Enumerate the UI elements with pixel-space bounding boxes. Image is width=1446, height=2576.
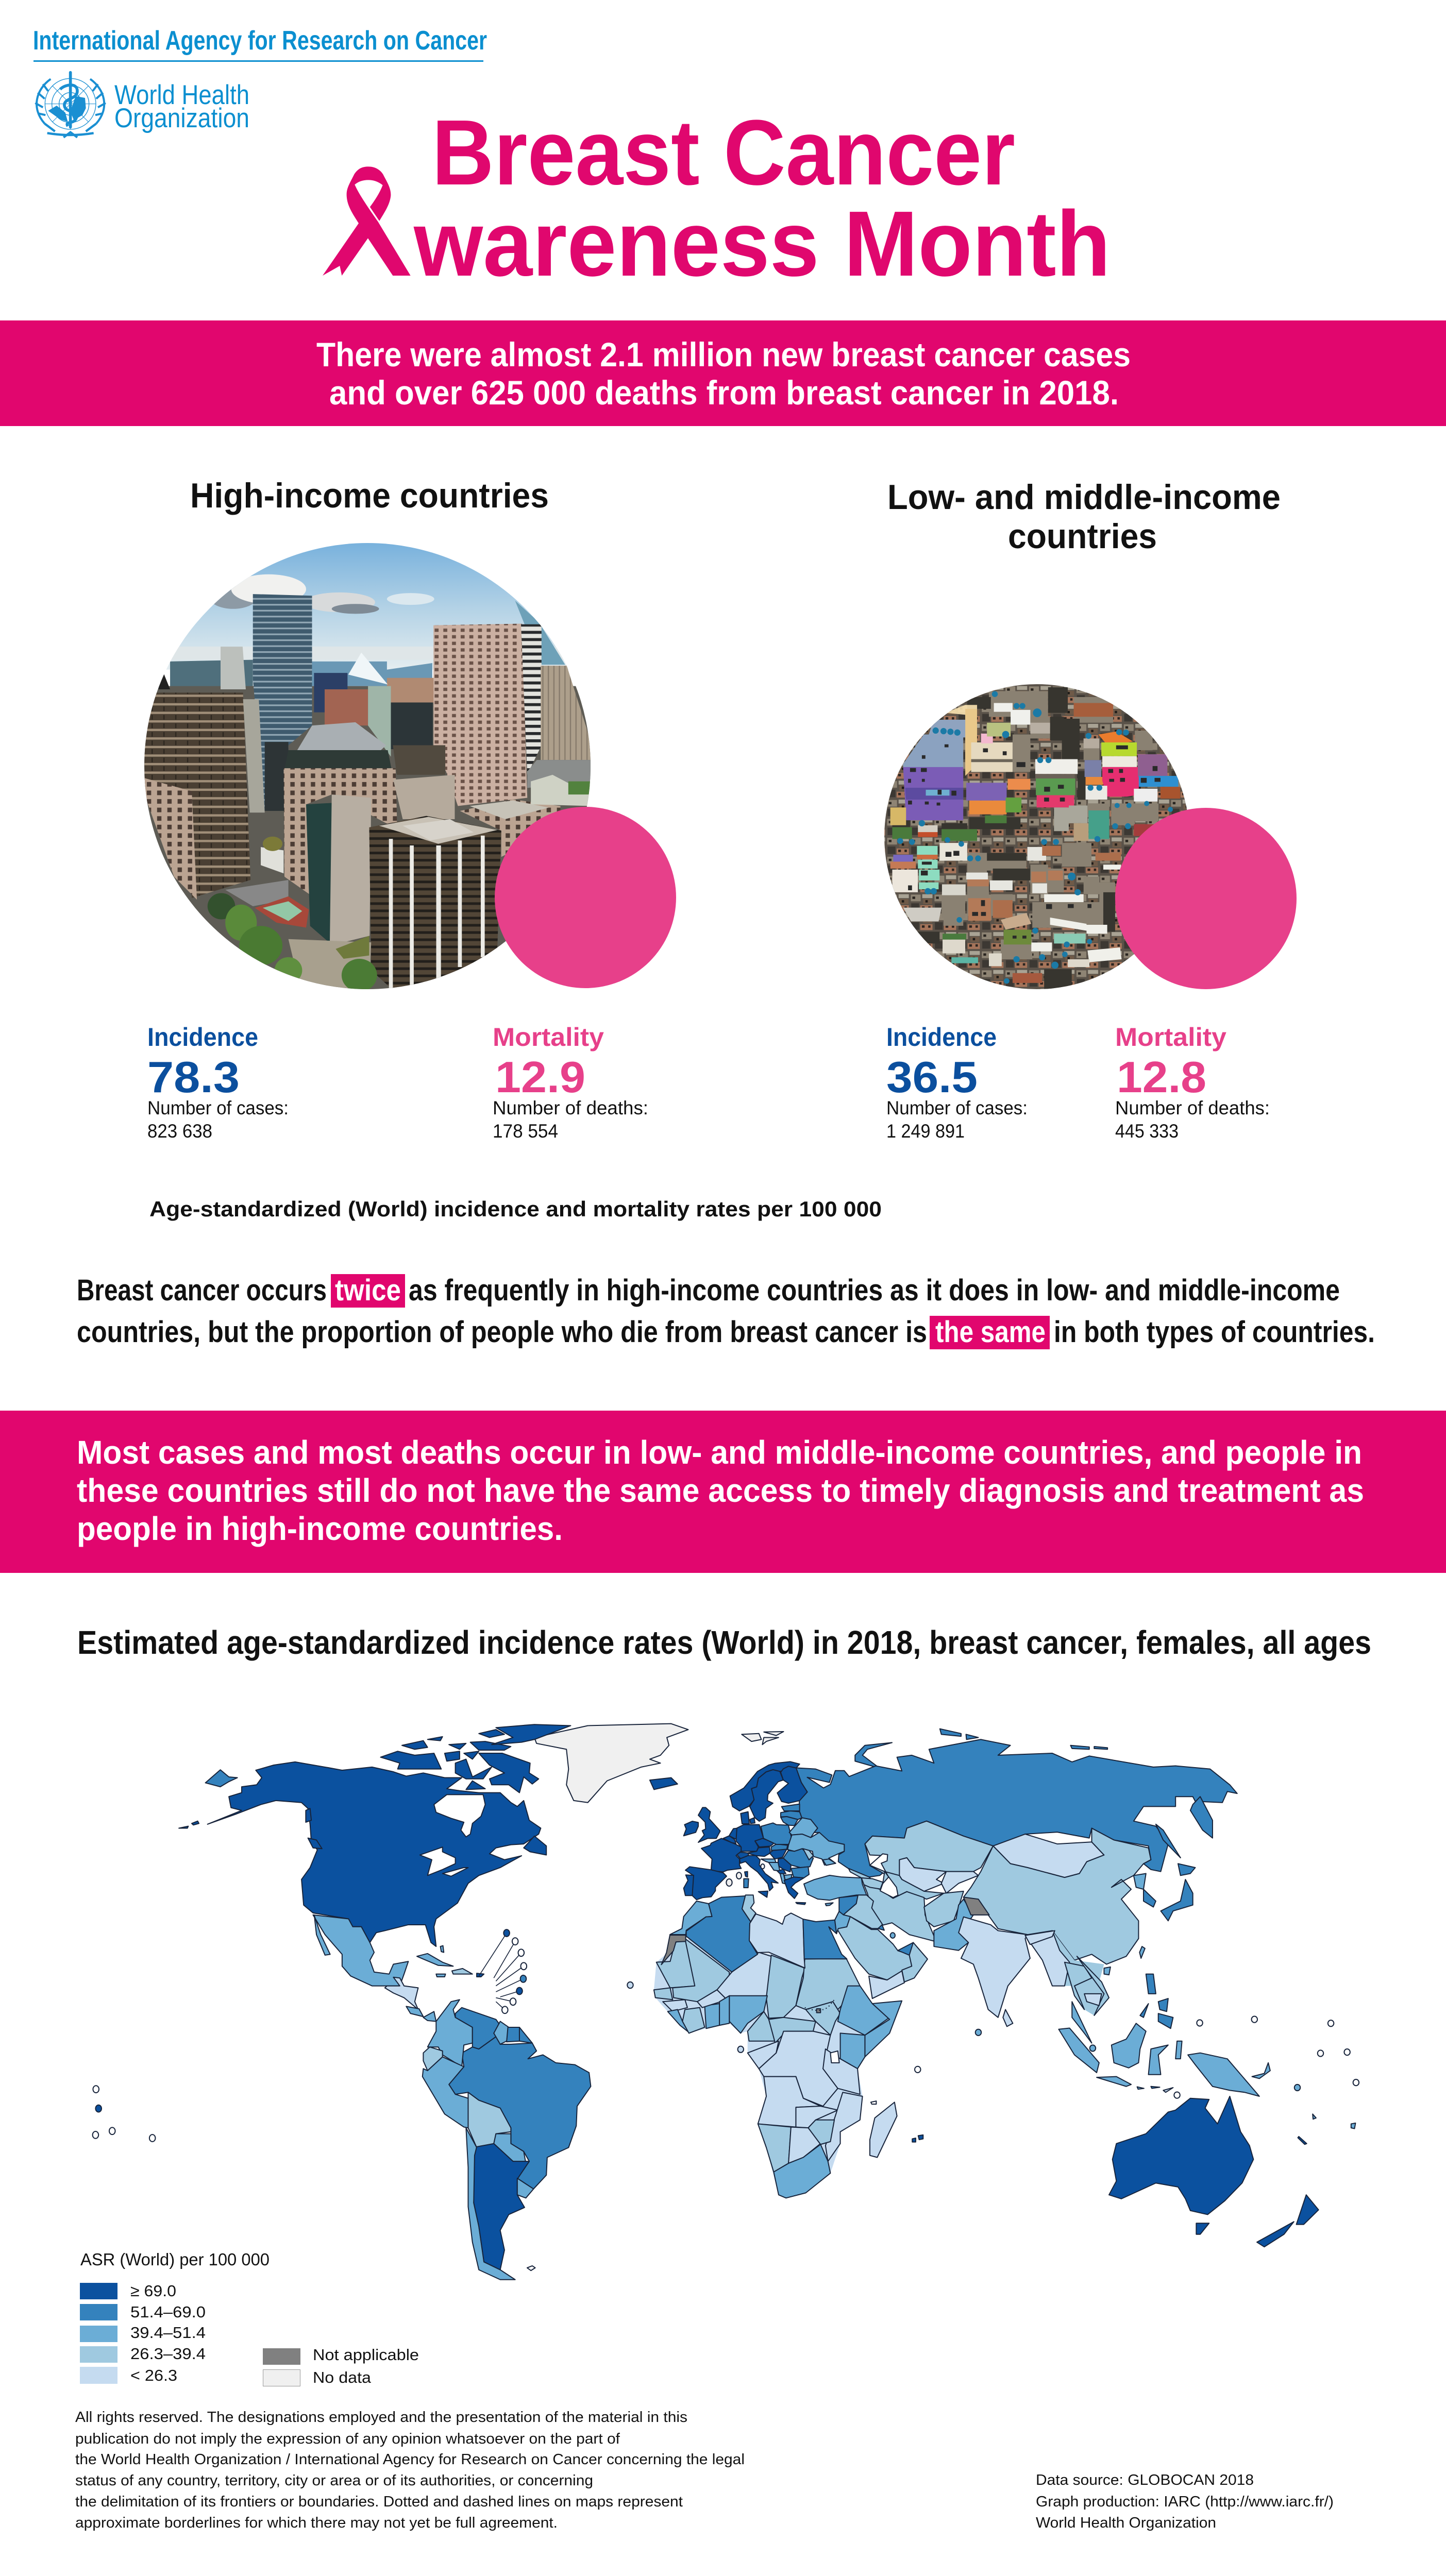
disclaimer text: publication do not imply the expression of any opinion whatsoever on the part of (75, 2431, 620, 2447)
banner: access to care: Most cases and most deaths occur in low- and middle-income countries, and people in (77, 1434, 1362, 1471)
comparison paragraph: the same (935, 1315, 1046, 1349)
comparison paragraph (77, 1274, 1375, 1349)
data source credits: Graph production: IARC (http://www.iarc.fr/) (1036, 2494, 1334, 2510)
rates caption: Age-standardized (World) incidence and mortality rates per 100 000 (149, 1197, 882, 1221)
stats: high-income mortality: Number of deaths: (493, 1097, 648, 1118)
disclaimer text: approximate borderlines for which there may not yet be full agreement. (75, 2515, 558, 2531)
legend: not applicable and no data: No data (313, 2368, 372, 2386)
legend: ASR colour scale: 26.3–39.4 (130, 2345, 206, 2363)
WHO wordmark (114, 80, 249, 133)
IARC header text (33, 26, 487, 62)
stats: low- and middle-income mortality (1115, 1023, 1270, 1142)
legend: not applicable and no data: Not applicable (313, 2346, 419, 2364)
comparison paragraph: Breast cancer occurs (77, 1274, 327, 1307)
map: Europe, Middle East and North Africa (661, 1761, 895, 1972)
map: Asia, sub-Saharan Africa and Oceania (627, 1729, 1359, 2247)
data source credits (1036, 2472, 1334, 2531)
stats: high-income incidence: Incidence (147, 1023, 258, 1052)
banner: global burden: There were almost 2.1 million new breast cancer cases (316, 335, 1131, 374)
WHO wordmark: World Health (114, 80, 249, 110)
photo: favela in circle (884, 683, 1192, 993)
stats: high-income incidence: 823 638 (147, 1121, 212, 1142)
legend: not applicable and no data (263, 2346, 419, 2386)
heading: low- and middle-income countries (887, 478, 1281, 556)
disclaimer text: All rights reserved. The designations employed and the presentation of the material in this (75, 2409, 687, 2426)
banner: access to care: these countries still do not have the same access to timely diagnosis and treatment as (77, 1472, 1364, 1509)
stats: high-income mortality: 12.9 (495, 1053, 585, 1102)
WHO wordmark: Organization (114, 103, 249, 133)
stats: low- and middle-income mortality: 12.8 (1117, 1053, 1206, 1102)
stats: high-income incidence (147, 1023, 289, 1142)
legend: ASR colour scale: ≥ 69.0 (130, 2282, 176, 2300)
stats: low- and middle-income mortality: 445 333 (1115, 1121, 1179, 1142)
mortality circle: low- and middle-income (1115, 808, 1297, 989)
banner: access to care: people in high-income countries. (77, 1510, 563, 1547)
banner: global burden (0, 320, 1446, 426)
stats: high-income mortality: Mortality (493, 1023, 604, 1052)
legend: ASR colour scale (80, 2250, 270, 2384)
legend: ASR colour scale: < 26.3 (130, 2366, 177, 2384)
legend: ASR colour scale: 51.4–69.0 (130, 2303, 206, 2321)
data source credits: World Health Organization (1036, 2515, 1216, 2531)
stats: low- and middle-income incidence: Number of cases: (886, 1097, 1028, 1118)
stats: high-income mortality: 178 554 (493, 1121, 558, 1142)
choropleth world map (93, 1724, 1359, 2280)
stats: high-income mortality (493, 1023, 648, 1142)
comparison paragraph: twice (335, 1274, 401, 1307)
stats: low- and middle-income incidence (886, 1023, 1028, 1142)
comparison paragraph: countries, but the proportion of people who die from breast cancer is (77, 1315, 927, 1349)
banner: access to care (0, 1411, 1446, 1573)
stats: low- and middle-income incidence: 36.5 (886, 1053, 978, 1102)
banner: global burden: and over 625 000 deaths from breast cancer in 2018. (329, 374, 1119, 412)
photo: high-income city skyline in circle (139, 538, 600, 992)
disclaimer text: the delimitation of its frontiers or boundaries. Dotted and dashed lines on maps represent (75, 2494, 683, 2510)
comparison paragraph: in both types of countries. (1054, 1315, 1375, 1349)
stats: high-income incidence: Number of cases: (147, 1097, 289, 1118)
heading: low- and middle-income countries: Low- and middle-income (887, 478, 1281, 517)
mortality circle: high-income (495, 807, 676, 988)
title: Breast Cancer (432, 101, 1015, 205)
stats: low- and middle-income incidence: 1 249 891 (886, 1121, 965, 1142)
heading: high-income countries: High-income countries (190, 476, 549, 515)
data source credits: Data source: GLOBOCAN 2018 (1036, 2472, 1254, 2488)
stats: low- and middle-income mortality: Mortality (1115, 1023, 1226, 1052)
disclaimer text (75, 2409, 745, 2531)
map: Americas and Greenland (93, 1724, 688, 2280)
stats: low- and middle-income incidence: Incidence (886, 1023, 997, 1052)
disclaimer text: the World Health Organization / International Agency for Research on Cancer concerning the legal (75, 2451, 745, 2468)
stats: low- and middle-income mortality: Number of deaths: (1115, 1097, 1270, 1118)
title: wareness Month (413, 192, 1111, 296)
icon: WHO emblem (35, 73, 106, 138)
title (413, 101, 1111, 296)
legend: ASR colour scale: ASR (World) per 100 000 (80, 2250, 270, 2269)
legend: ASR colour scale: 39.4–51.4 (130, 2324, 206, 2342)
stats: high-income incidence: 78.3 (147, 1053, 240, 1102)
IARC header text: International Agency for Research on Cancer (33, 26, 487, 56)
heading: low- and middle-income countries: countries (1008, 517, 1157, 556)
icon: pink ribbon (323, 166, 411, 276)
disclaimer text: status of any country, territory, city or area or of its authorities, or concerning (75, 2472, 593, 2489)
